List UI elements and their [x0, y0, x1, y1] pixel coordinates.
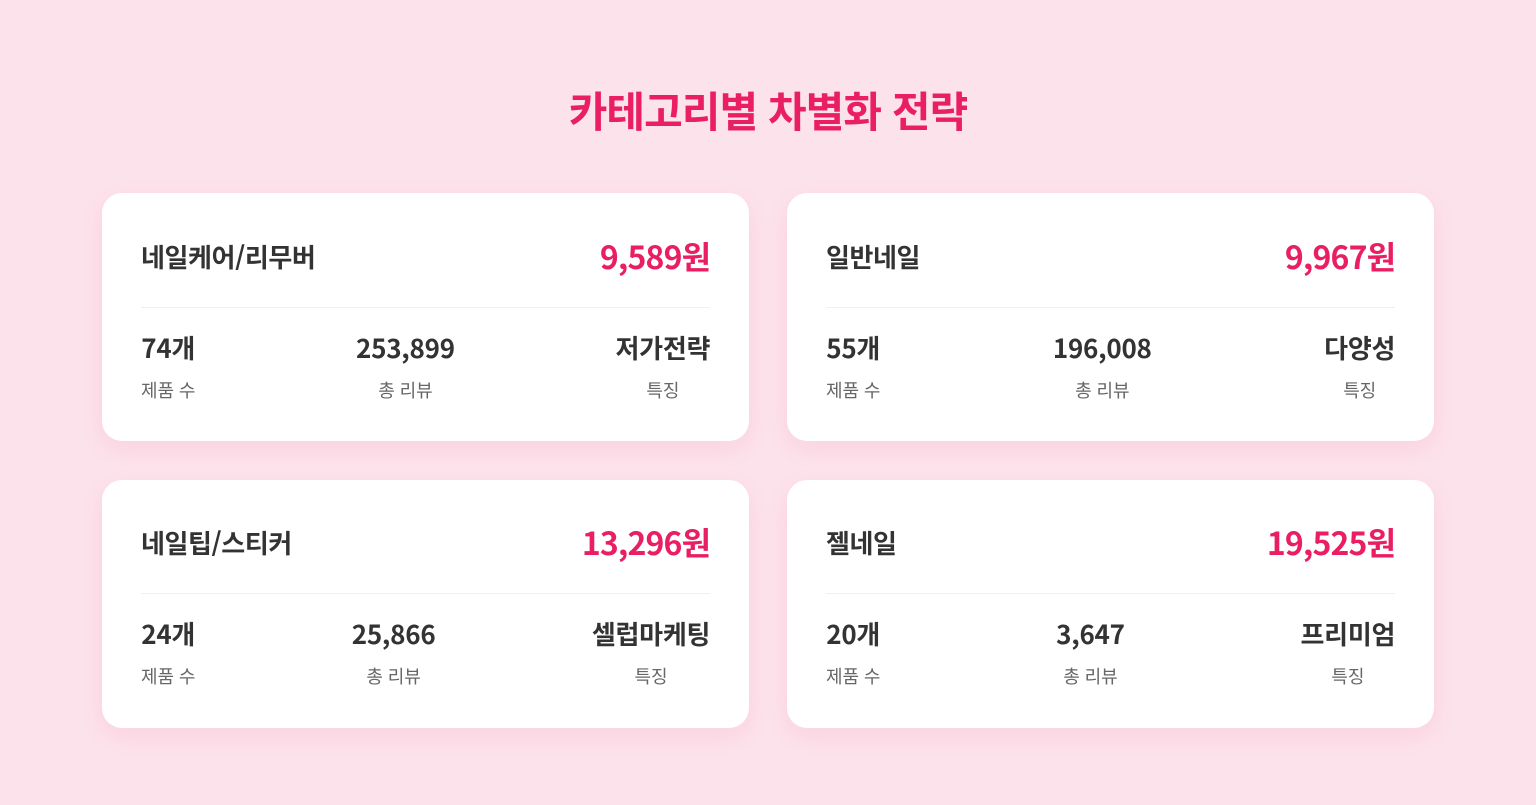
card header: nail tip / sticker [141, 480, 710, 594]
stat: total reviews: 3,647 [1056, 615, 1125, 652]
stat: product count: 55개 [826, 329, 880, 366]
stat: total reviews: 총 리뷰 [366, 663, 421, 689]
category name: 젤네일 [826, 524, 897, 561]
panel: gel nail [787, 480, 1434, 728]
stat: feature: 특징 [646, 377, 679, 403]
panel: general nail [787, 193, 1434, 441]
stat: total reviews: 총 리뷰 [1075, 377, 1129, 403]
stat: feature: 다양성 [1324, 329, 1395, 366]
stat: product count: 제품 수 [141, 663, 195, 689]
stat: feature [616, 329, 710, 403]
stat: product count [141, 615, 195, 689]
stats row [141, 329, 710, 403]
panel: nail care / remover [102, 193, 748, 441]
stat: product count: 제품 수 [826, 663, 880, 689]
category name: 일반네일 [826, 238, 920, 275]
stat: total reviews: 196,008 [1053, 329, 1152, 366]
stat: product count [826, 615, 880, 689]
stat: total reviews: 25,866 [352, 615, 435, 652]
stat: total reviews: 253,899 [356, 329, 455, 366]
category name: 네일팁/스티커 [141, 524, 292, 561]
stat: product count: 제품 수 [826, 377, 880, 403]
stat: total reviews [1053, 329, 1152, 403]
stat: total reviews: 총 리뷰 [1063, 663, 1118, 689]
stat: feature: 특징 [1343, 377, 1376, 403]
stat: total reviews [352, 615, 435, 689]
card header: general nail [826, 193, 1394, 308]
title: 카테고리별 차별화 전략 [569, 79, 967, 140]
stat: feature [1301, 615, 1395, 689]
stat: product count [141, 329, 195, 403]
stat: feature: 특징 [635, 663, 667, 689]
stats row [826, 329, 1395, 403]
average price: 9,967원 [1285, 233, 1395, 279]
stat: feature: 프리미엄 [1301, 615, 1395, 652]
stat: total reviews [356, 329, 455, 403]
panel: nail tip / sticker [102, 480, 748, 728]
stat: product count [826, 329, 880, 403]
card header: nail care / remover [141, 193, 710, 308]
average price: 19,525원 [1267, 519, 1395, 565]
stat: feature: 저가전략 [616, 329, 710, 366]
stats row [826, 615, 1395, 689]
stat: total reviews: 총 리뷰 [378, 377, 433, 403]
stat: total reviews [1056, 615, 1125, 689]
stat: product count: 20개 [826, 615, 880, 652]
stat: product count: 24개 [141, 615, 195, 652]
stat: feature: 특징 [1331, 663, 1364, 689]
stat: feature [592, 615, 710, 689]
stats row [141, 615, 710, 689]
stat: product count: 74개 [141, 329, 195, 366]
average price: 9,589원 [600, 233, 710, 279]
card header: gel nail [826, 480, 1394, 594]
category name: 네일케어/리무버 [141, 238, 315, 275]
average price: 13,296원 [582, 519, 710, 565]
stat: feature: 셀럽마케팅 [592, 615, 710, 652]
stat: feature [1324, 329, 1395, 403]
stat: product count: 제품 수 [141, 377, 195, 403]
